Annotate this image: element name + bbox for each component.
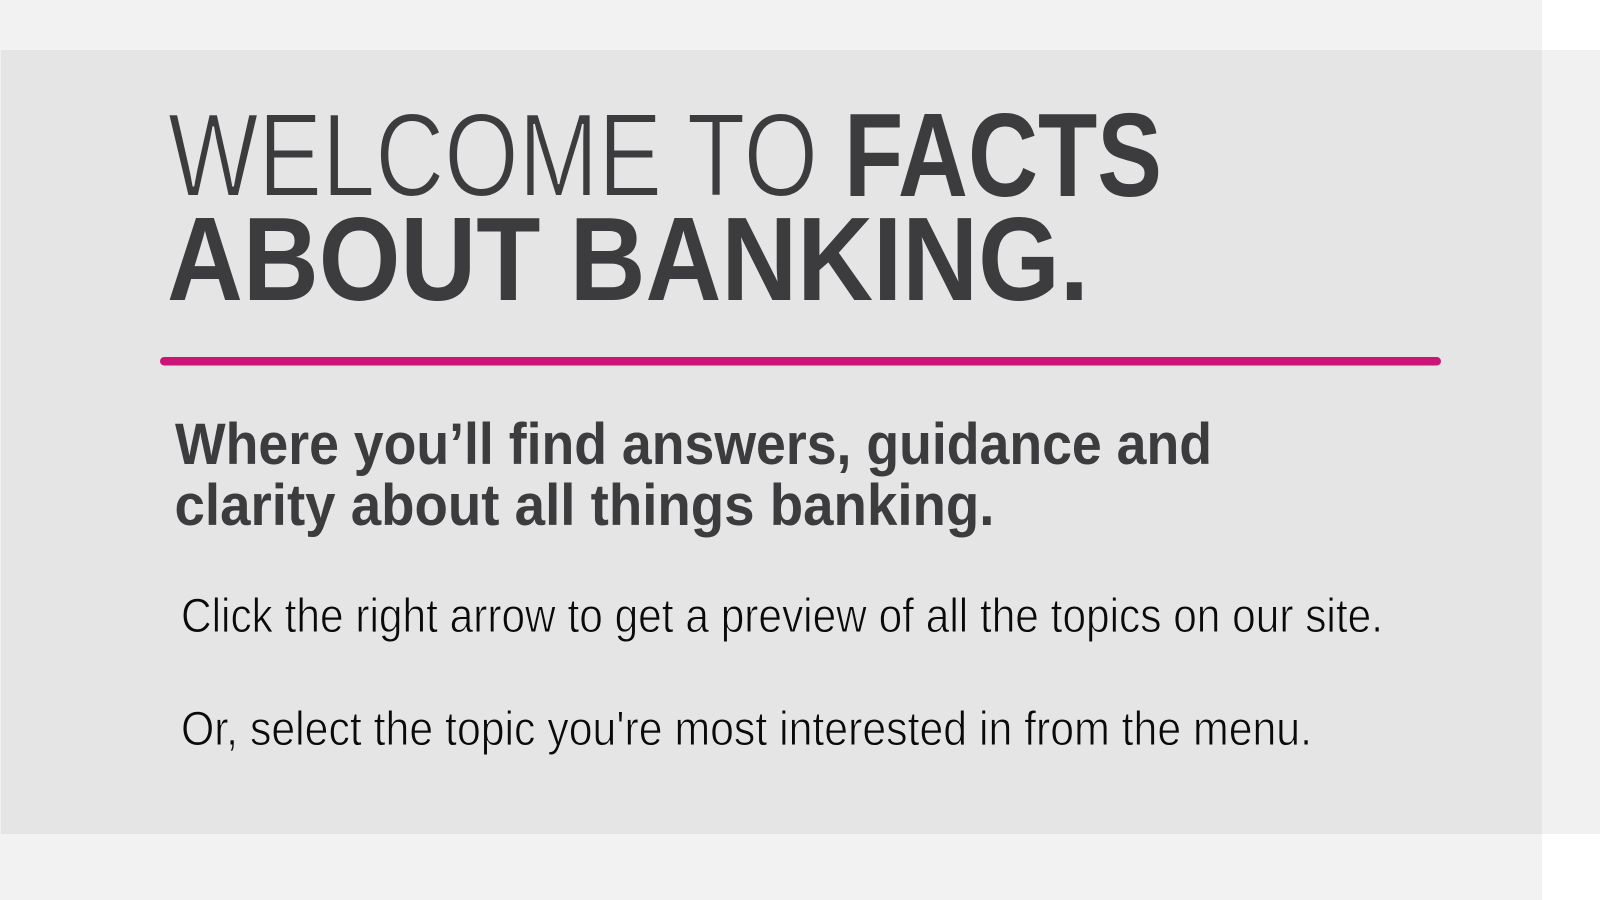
subheading line 1: Where you’ll find answers, guidance and (175, 412, 1212, 477)
subheading (174, 412, 1212, 538)
body text (181, 590, 1383, 756)
title (167, 89, 1162, 326)
subheading line 2: clarity about all things banking. (174, 473, 994, 538)
title line 1 light: WELCOME TO (168, 89, 818, 222)
instruction: menu: Or, select the topic you're most interested in from the menu. (181, 703, 1312, 756)
title line 1 bold: FACTS (844, 89, 1162, 222)
title line 2 bold: ABOUT BANKING. (167, 193, 1089, 326)
divider: magenta rule (160, 357, 1441, 366)
instruction: right arrow: Click the right arrow to get a preview of all the topics on our site. (181, 590, 1383, 643)
